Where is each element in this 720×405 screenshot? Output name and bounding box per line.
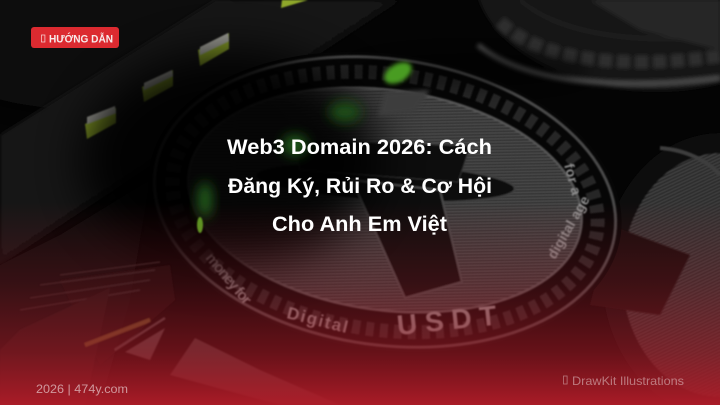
- credit: DrawKit Illustrations: DrawKit Illustrations: [572, 374, 684, 388]
- dark circuit strip with green lights: [0, 0, 400, 405]
- badge: HƯỚNG DẪN: HƯỚNG DẪN: [49, 32, 113, 45]
- right coin: [590, 133, 720, 405]
- coin lettering: money for: [202, 250, 255, 308]
- top right coin: [465, 0, 720, 107]
- coin lettering: for a: [561, 162, 585, 197]
- footer: year and site: 2026 | 474y.com: [36, 382, 128, 396]
- coin lettering: USDT: [395, 300, 498, 341]
- green glows: [197, 58, 430, 233]
- central USDT coin: [129, 22, 641, 382]
- badge icon placeholder: [42, 35, 45, 42]
- title: [227, 135, 492, 236]
- title: Cho Anh Em Việt: [272, 212, 447, 236]
- title: Web3 Domain 2026: Cách: [227, 135, 492, 159]
- badge: HƯỚNG DẪN: [31, 27, 119, 48]
- lower left coin: [0, 262, 340, 405]
- title: Đăng Ký, Rủi Ro & Cơ Hội: [228, 174, 492, 198]
- coin lettering: [202, 162, 593, 341]
- shadow over upper left of coin: [80, 50, 380, 270]
- coin lettering: Digital: [285, 303, 350, 337]
- coin lettering: digital age: [544, 193, 593, 262]
- tether symbol: [254, 140, 516, 298]
